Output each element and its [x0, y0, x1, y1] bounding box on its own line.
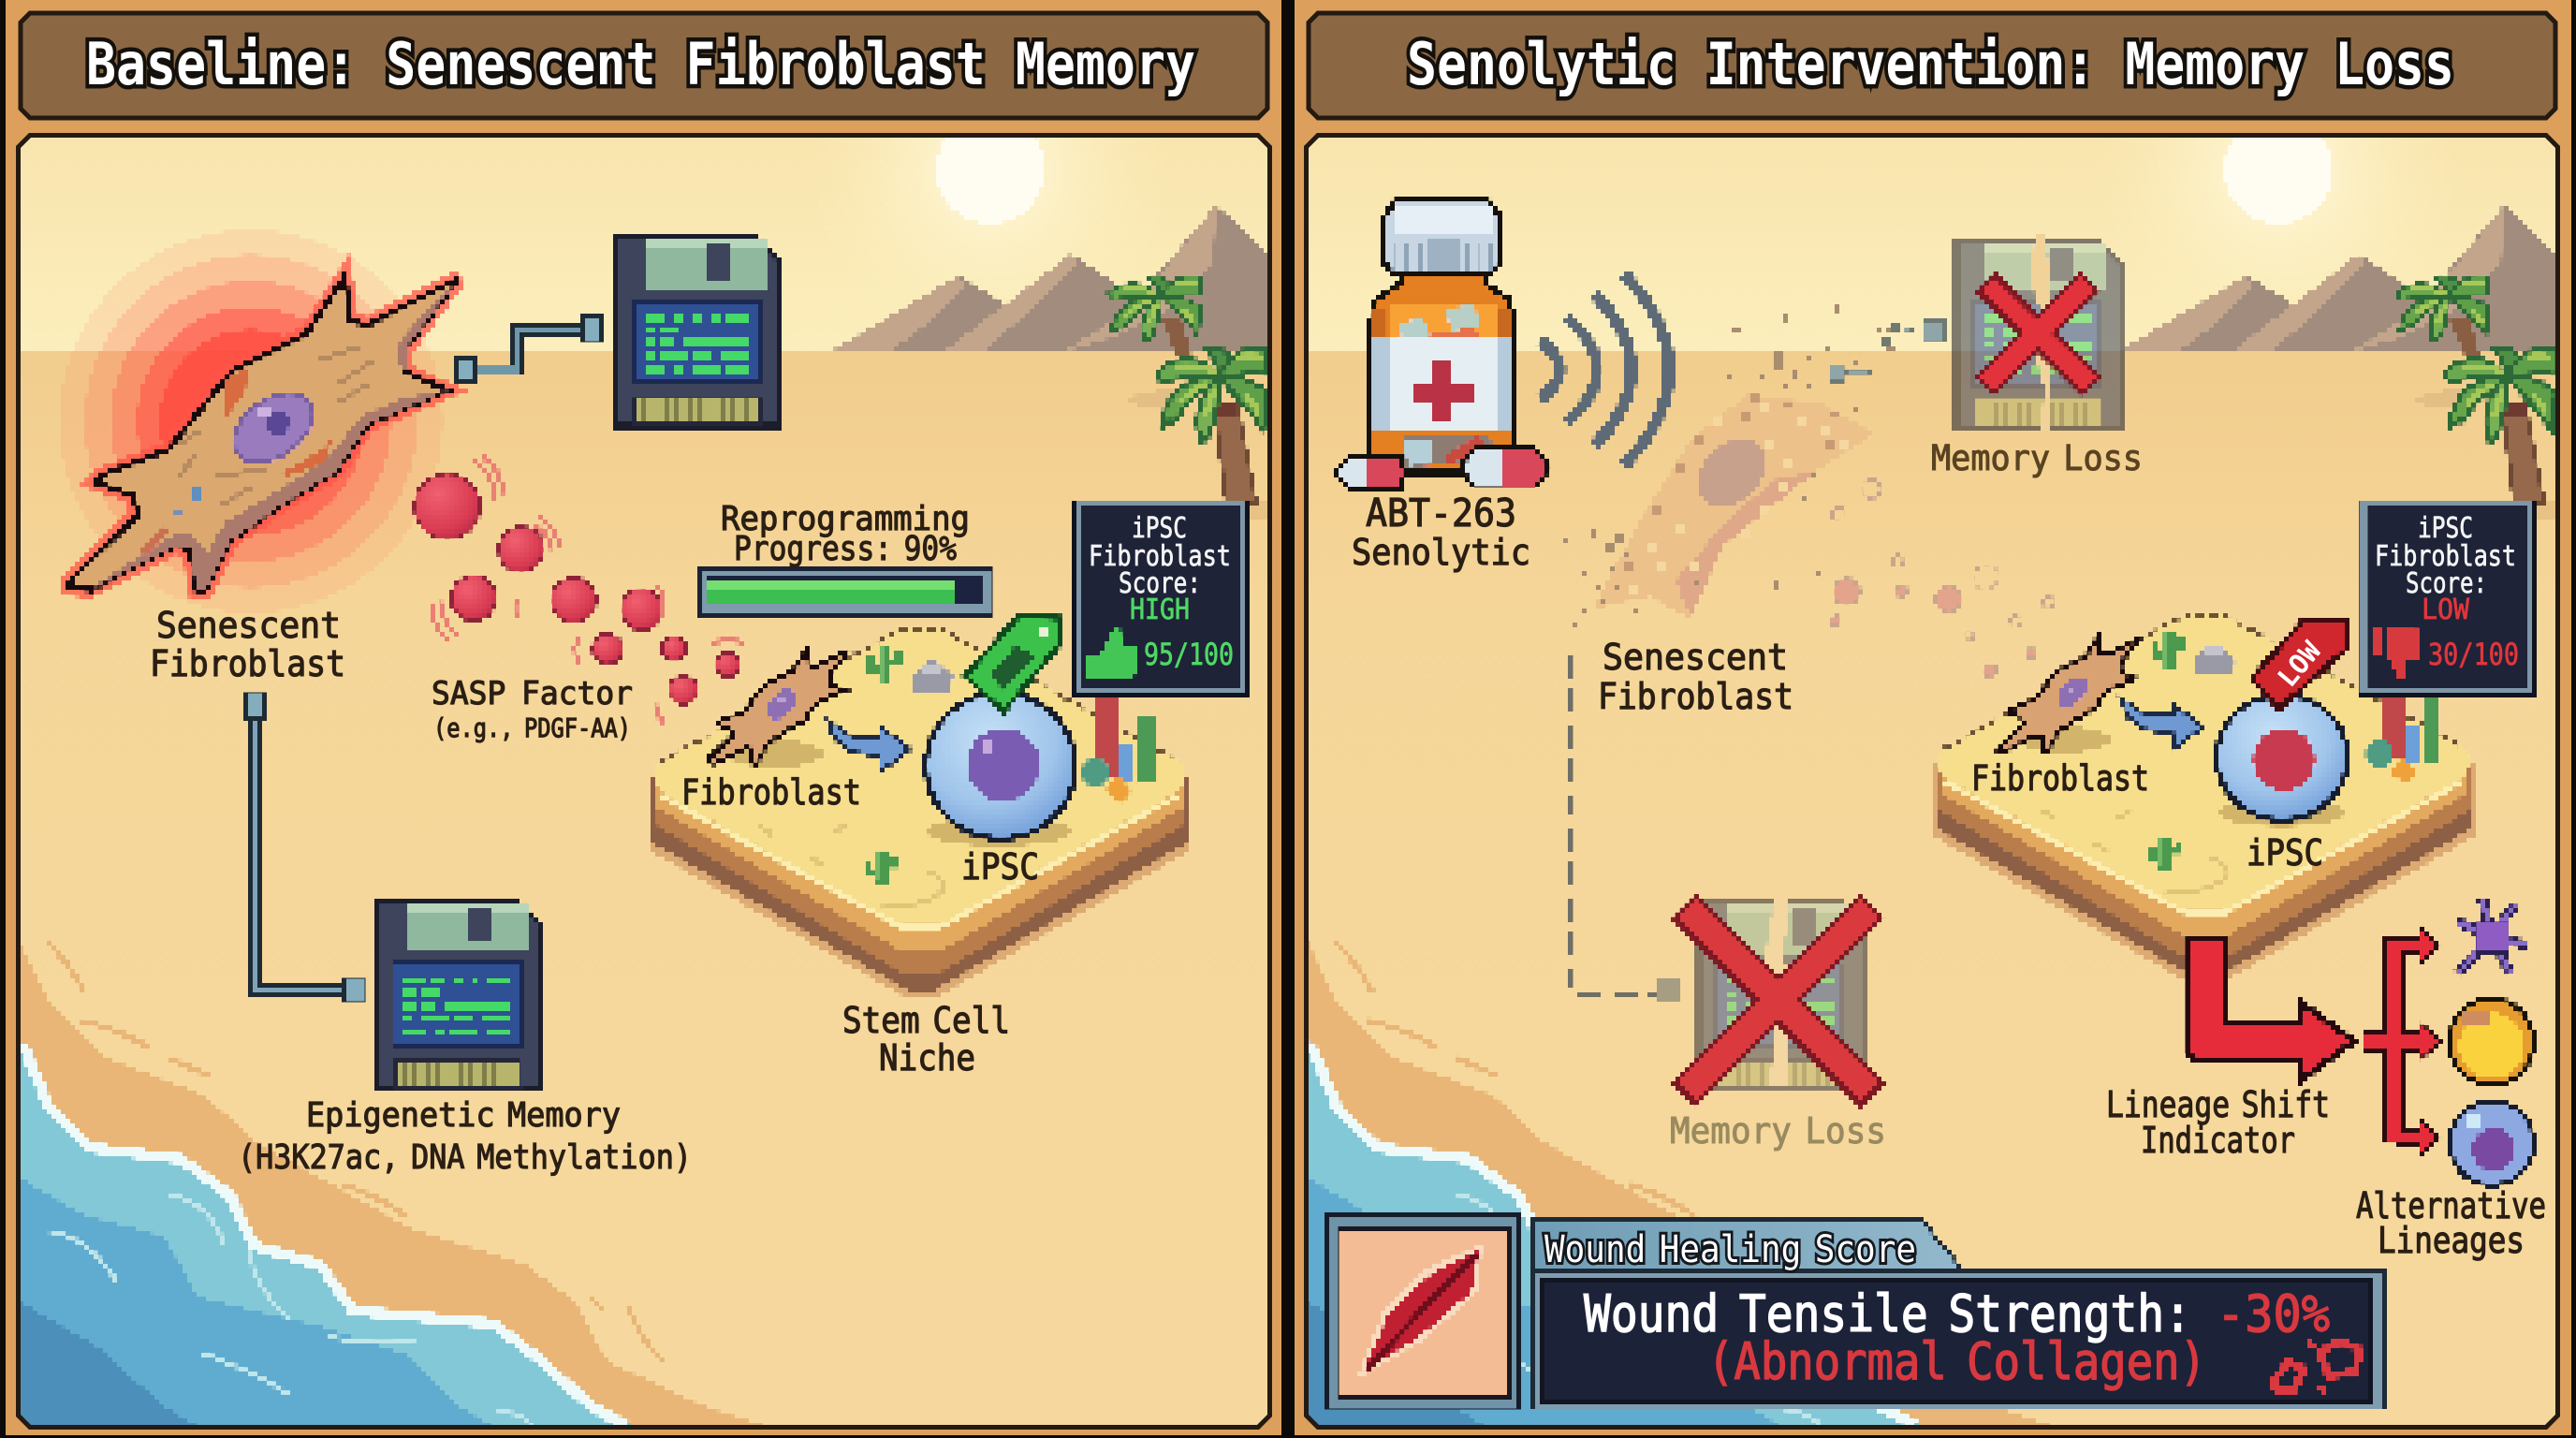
label: LOW tag text: LOW — [2271, 635, 2327, 693]
icon: dissolving senescent fibroblast — [1563, 304, 1895, 627]
label: memory loss top: Memory Loss — [1931, 438, 2143, 478]
heading plate senolytic — [1309, 13, 2555, 118]
icon: broken chain — [2273, 1341, 2361, 1393]
frame: wood around senolytic panel — [1295, 0, 2576, 1438]
label: iPSC fibroblast score high: HIGH — [1130, 594, 1190, 626]
icon: red LOW tag — [2251, 619, 2348, 709]
label: iPSC fibroblast score high: Score: — [1119, 567, 1201, 600]
icon: iPSC cell — [926, 693, 1076, 846]
icon: thumbs up — [1086, 628, 1136, 679]
icon: broken dashed connector — [1572, 655, 1678, 1001]
wound healing tab — [1531, 1219, 1966, 1273]
icon: neuron lineage — [2457, 899, 2527, 974]
icon: senescent fibroblast with red glow — [59, 229, 459, 613]
frame: scene outline baseline — [19, 135, 1269, 1427]
frame: outer right and bottom edge — [1295, 0, 2576, 1438]
scene background: desert, sun, palms and beach — [20, 0, 1278, 1426]
label: iPSC fibroblast score high: iPSC — [1132, 512, 1187, 545]
label: epigenetic memory: (H3K27ac, DNA Methylation) — [238, 1138, 692, 1177]
label: SASP factor: SASP Factor — [432, 675, 633, 712]
label: ABT-263 senolytic: ABT-263 — [1366, 491, 1516, 536]
label: memory loss bottom: Memory Loss — [1670, 1110, 1886, 1152]
icon: floppy disk, epigenetic memory — [376, 901, 541, 1089]
label: wound healing score: Wound Healing Score — [1544, 1228, 1916, 1271]
label: iPSC fibroblast score high: Fibroblast — [1089, 540, 1231, 573]
label: senescent fibroblast: Fibroblast — [150, 643, 345, 684]
label: iPSC fibroblast score low: LOW — [2422, 594, 2470, 626]
label: epigenetic memory: Epigenetic Memory — [306, 1096, 621, 1135]
icon: blue cell lineage — [2450, 1101, 2534, 1185]
progress bar — [700, 568, 992, 614]
label: iPSC fibroblast score low: Score: — [2406, 567, 2487, 600]
label: iPSC fibroblast score low: Fibroblast — [2375, 540, 2516, 573]
icon: fibroblast to iPSC arrow — [2120, 698, 2203, 750]
icon: island decorations — [2153, 630, 2440, 870]
panel: baseline senescent fibroblast memory — [0, 0, 1295, 1438]
label: iPSC fibroblast score high: 95/100 — [1144, 637, 1234, 672]
label: stem cell niche: Stem Cell — [842, 1000, 1010, 1041]
score box background — [2358, 499, 2535, 697]
wound score panel — [1533, 1271, 2383, 1409]
label: abnormal collagen: (Abnormal Collagen) — [1707, 1332, 2206, 1391]
label: alternative lineages: Lineages — [2378, 1220, 2525, 1261]
icon: connector to top floppy — [456, 317, 602, 382]
icon: small fibroblast — [1998, 637, 2140, 753]
center divider — [1281, 0, 1295, 1438]
label: senescent fibroblast right: Fibroblast — [1598, 676, 1793, 717]
icon: island decorations — [869, 644, 1156, 884]
icon: connector to epigenetic memory floppy — [245, 693, 365, 1002]
label: iPSC fibroblast score low: 30/100 — [2428, 637, 2519, 672]
score box background — [1072, 499, 1249, 697]
label: fibroblast on island: Fibroblast — [681, 772, 861, 813]
label: reprogramming progress: Progress: 90% — [734, 530, 957, 568]
panel: senolytic intervention memory loss — [1295, 0, 2576, 1438]
label: wound tensile strength: Wound Tensile Strength: — [1584, 1284, 2191, 1343]
icon: green tag — [965, 616, 1059, 712]
icon: SASP factor particles — [415, 457, 744, 723]
title: baseline: Baseline: Senescent Fibroblast Memory — [86, 30, 1195, 98]
label: iPSC on island: iPSC — [961, 846, 1039, 888]
stem cell niche island — [649, 616, 1191, 998]
label: wound tensile strength: -30% — [2217, 1284, 2330, 1343]
icon: wound — [1357, 1243, 1483, 1378]
icon: memory loss floppy with red X, bottom — [1683, 898, 1873, 1095]
label: senescent fibroblast right: Senescent — [1603, 637, 1788, 678]
label: fibroblast on right island: Fibroblast — [1971, 758, 2149, 799]
label: lineage shift indicator: Indicator — [2141, 1120, 2295, 1161]
frame: wood around baseline panel — [0, 0, 1281, 1438]
label: lineage shift indicator: Lineage Shift — [2106, 1084, 2330, 1125]
icon: yellow fat cell lineage — [2450, 999, 2534, 1085]
stem cell niche island, right — [1933, 615, 2475, 984]
panel artwork: baseline scene — [20, 0, 1278, 1426]
icon: signal arcs — [1540, 274, 1670, 465]
icon: small fibroblast — [707, 649, 849, 768]
icon: branching arrows — [2364, 929, 2440, 1156]
icon: iPSC cell with red nucleus — [2217, 695, 2348, 827]
wound image panel — [1327, 1216, 1518, 1409]
label: iPSC on right island: iPSC — [2247, 832, 2323, 873]
icon: ABT-263 bottle and pills — [1335, 200, 1550, 488]
scene background: desert, sun, palms and beach — [1308, 0, 2566, 1426]
icon: thumbs down — [2371, 628, 2422, 679]
label: senescent fibroblast: Senescent — [156, 605, 341, 646]
label: reprogramming progress: Reprogramming — [721, 500, 970, 538]
frame: scene outline senolytic — [1307, 135, 2557, 1427]
heading plate baseline — [21, 13, 1267, 118]
frame: outer left and bottom edge — [0, 0, 1281, 1438]
icon: floppy disk, top — [616, 238, 781, 426]
label: SASP factor: (e.g., PDGF-AA) — [433, 712, 631, 743]
panel artwork: senolytic scene — [1308, 0, 2566, 1426]
label: ABT-263 senolytic: Senolytic — [1352, 532, 1530, 573]
icon: lineage shift arrow — [2187, 938, 2354, 1081]
label: iPSC fibroblast score low: iPSC — [2418, 512, 2473, 545]
icon: fibroblast to iPSC arrow — [827, 721, 911, 772]
wound score panel inner — [1541, 1281, 2372, 1401]
icon: memory loss floppy with red X, top — [1956, 236, 2121, 429]
label: stem cell niche: Niche — [879, 1037, 975, 1078]
icon: fading SASP particles — [1831, 479, 2054, 678]
icon: broken connector fragments — [1830, 320, 1944, 382]
